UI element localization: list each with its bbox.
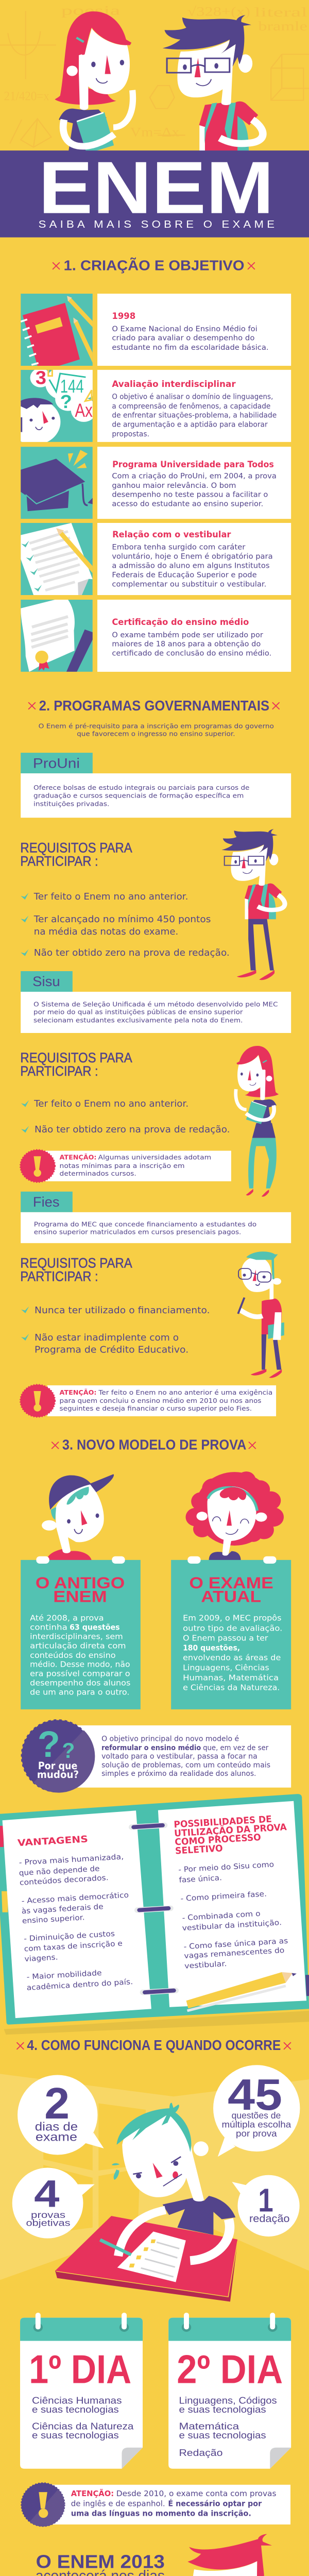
card: certificação do ensino médio — [21, 600, 291, 672]
notebook page: vantagens: - Diminuição de custos — [24, 1929, 115, 1943]
bubble: 4 provas objetivas: 4 — [34, 2173, 60, 2215]
heading: requisitos ProUni: REQUISITOS PARA — [20, 840, 132, 855]
panel: Sisu description — [21, 992, 291, 1033]
badge: por que mudou: Por que — [38, 1760, 77, 1772]
card: 1998 — [21, 294, 291, 366]
checklist: requisitos ProUni: Ter alcançado no mínimo 450 pontos — [33, 914, 211, 925]
tab: ProUni: ProUni — [33, 755, 80, 771]
callout: atenção Sisu: notas mínimas para a inscrição em — [60, 1162, 185, 1170]
heading: requisitos Fies: PARTICIPAR : — [20, 1268, 98, 1284]
panel: o antigo Enem: ENEM — [53, 1588, 107, 1605]
panel: Fies description: Programa do MEC que concede financiamento a estudantes do — [34, 1221, 256, 1228]
notebook page: possibilidades de utilização: COMO PROCESSO — [175, 1832, 261, 1848]
panel: Sisu description: por meio do qual as instituições públicas de ensino superior — [33, 1009, 243, 1016]
badge: por que mudou: ? — [38, 1723, 60, 1765]
callout: por que mudou: voltado para o vestibular, passa a focar na — [101, 1753, 258, 1760]
icon: answer sheet with pencil — [21, 523, 93, 595]
card: certificação do ensino médio: Certificação do ensino médio — [112, 617, 249, 628]
bubble: 4 provas objetivas — [12, 2168, 95, 2239]
panel: o exame atual — [171, 1556, 291, 1709]
card: programa universidade para todos: ganhou maior relevância. O bom — [112, 482, 236, 490]
card: programa universidade para todos: Programa Universidade para Todos — [112, 460, 274, 470]
notebook page: possibilidades de utilização: POSSIBILIDADES DE — [174, 1814, 272, 1830]
decorative math scribbles: poesia — [61, 3, 121, 18]
notebook page: vantagens: - Maior mobilidade — [26, 1969, 102, 1981]
calendar: 1º dia: e suas tecnologias — [32, 2430, 119, 2441]
panel: o antigo Enem: Até 2008, a prova — [30, 1614, 104, 1623]
callout: atenção Fies: Ter feito o Enem no ano anterior é uma exigência — [98, 1389, 272, 1397]
card: certificação do ensino médio: maiores de 18 anos para a obtenção do — [112, 640, 261, 649]
callout: atenção línguas: É necessário optar por — [168, 2499, 262, 2508]
callout: por que mudou: solução de problemas, com um conteúdo mais — [101, 1761, 270, 1770]
title band — [0, 146, 309, 238]
heading: requisitos Fies — [20, 1255, 132, 1284]
callout: atenção línguas: de inglês e de espanhol. — [71, 2499, 165, 2508]
panel: ProUni description — [21, 773, 291, 818]
callout: por que mudou: que, em vez de ser — [203, 1744, 268, 1752]
calendar: 2º dia — [168, 2315, 291, 2469]
checklist: requisitos Sisu: Não ter obtido zero na prova de redação. — [35, 1124, 230, 1135]
panel: o antigo Enem: O ANTIGO — [36, 1574, 125, 1592]
decorative math scribbles: √328+(x) — [187, 4, 250, 19]
checklist: requisitos ProUni — [21, 892, 230, 958]
checklist: requisitos Fies: Nunca ter utilizado o financiamento. — [35, 1305, 210, 1316]
callout: atenção línguas: ATENÇÃO: — [71, 2489, 114, 2498]
heading: section 3: 3. NOVO MODELO DE PROVA — [62, 1437, 246, 1453]
bubble: 45 questões: múltipla escolha — [221, 2120, 291, 2130]
card: relação com o vestibular: Relação com o vestibular — [112, 530, 231, 540]
card: programa universidade para todos — [21, 447, 291, 519]
icon: exclamation badge — [20, 1150, 55, 1182]
heading: requisitos Fies: REQUISITOS PARA — [20, 1255, 132, 1270]
panel: o antigo Enem: médio. Desse modo, não — [30, 1660, 130, 1669]
illustration: boy with pencil and book — [238, 1251, 284, 1378]
panel: o exame atual: O EXAME — [189, 1574, 273, 1592]
notebook page: vantagens: VANTAGENS — [17, 1834, 88, 1849]
heading: requisitos ProUni: PARTICIPAR : — [20, 854, 98, 869]
bubble: 4 provas objetivas: provas — [31, 2210, 65, 2220]
notebook page: possibilidades de utilização: fase única. — [179, 1874, 222, 1885]
card: 1998: estudante no fim da escolaridade básica. — [112, 344, 269, 352]
notebook page: possibilidades de utilização: UTILIZAÇÃO DA PROVA — [174, 1821, 287, 1839]
notebook page: vantagens — [17, 1834, 133, 1992]
illustration: student taking the exam — [55, 2103, 237, 2302]
card: programa universidade para todos: desempenho no teste passou a facilitar o — [112, 491, 268, 499]
panel: o antigo Enem: conteúdos do ensino — [30, 1651, 116, 1660]
bubble: 2 dias de exame — [18, 2075, 104, 2155]
calendar: 1º dia: 1º DIA — [29, 2347, 131, 2392]
illustration: full body girl — [236, 1046, 279, 1197]
panel: o exame atual: Humanas, Matemática — [183, 1673, 279, 1682]
bubble: 4 provas objetivas: objetivas — [26, 2217, 71, 2228]
illustration: boy with cap — [42, 1474, 114, 1561]
notebook page: vantagens: que não depende de — [19, 1865, 100, 1877]
notebook page: vantagens: às vagas federais de — [21, 1903, 104, 1916]
card: 1998: criado para avaliar o desempenho do — [112, 334, 255, 343]
card: programa universidade para todos: Com a criação do ProUni, em 2004, a prova — [112, 472, 277, 480]
badge: por que mudou: mudou? — [37, 1769, 79, 1781]
icon: boy thinking with math cloud — [21, 367, 93, 442]
callout: por que mudou: simples e próximo da realidade dos alunos. — [101, 1770, 256, 1778]
icon: graduation cap — [21, 447, 93, 519]
calendar: 1º dia: Ciências da Natureza — [32, 2421, 134, 2432]
callout: atenção Sisu: ATENÇÃO: — [60, 1154, 96, 1162]
notebook page: vantagens: - Prova mais humanizada, — [19, 1853, 124, 1867]
bubble: 2 dias de exame: dias de — [35, 2121, 78, 2133]
notebook page: possibilidades de utilização: vestibular da instituição. — [182, 1919, 282, 1933]
calendar: 1º dia: e suas tecnologias — [32, 2404, 119, 2415]
heading: requisitos Sisu: REQUISITOS PARA — [20, 1050, 132, 1065]
notebook page: vantagens: - Acesso mais democrático — [21, 1891, 129, 1905]
notebook page: possibilidades de utilização: vestibular. — [184, 1960, 227, 1971]
card: 1998: O Exame Nacional do Ensino Médio foi — [112, 325, 258, 333]
section 2 intro text — [39, 723, 274, 738]
illustration: full body boy — [221, 829, 285, 980]
card: avaliação interdisciplinar: O objetivo é analisar o domínio de linguagens, — [112, 393, 273, 401]
date: Enem 2013: O ENEM 2013 — [36, 2551, 165, 2572]
illustration: red haired boy in teal circle — [181, 2534, 290, 2576]
checklist: requisitos Fies: Não estar inadimplente com o — [35, 1332, 179, 1343]
classroom wall and window — [0, 2074, 309, 2280]
decorative math scribbles — [0, 3, 309, 147]
heading: requisitos Sisu: PARTICIPAR : — [20, 1063, 98, 1079]
panel: Sisu description: O Sistema de Seleção Unificada é um método desenvolvido pelo MEC — [33, 1001, 278, 1008]
notebook page: possibilidades de utilização — [174, 1814, 288, 1971]
callout: atenção línguas: uma das línguas no momento da inscrição. — [71, 2509, 251, 2518]
notebook page: possibilidades de utilização: - Como primeira fase. — [180, 1890, 267, 1903]
tab: Sisu — [21, 971, 73, 992]
bubble: 45 questões — [213, 2065, 300, 2157]
card: relação com o vestibular: Federais de Educação Superior e pode — [112, 571, 257, 579]
card: programa universidade para todos: acesso do estudante ao ensino superior. — [112, 500, 263, 508]
checklist: requisitos ProUni: Não ter obtido zero na prova de redação. — [34, 948, 230, 958]
card: 1998: 1998 — [112, 311, 135, 321]
callout: atenção Sisu — [20, 1150, 231, 1182]
tab: Fies: Fies — [33, 1194, 60, 1210]
callout: atenção línguas: Desde 2010, o exame conta com provas — [116, 2489, 276, 2498]
decorative math scribbles: 21/420=x — [4, 89, 49, 103]
icon: diploma with seal — [21, 600, 93, 672]
card: certificação do ensino médio: certificado de conclusão do ensino médio. — [112, 650, 271, 657]
bubble: 45 questões: por prova — [236, 2128, 277, 2139]
callout: por que mudou: O objetivo principal do novo modelo é — [101, 1735, 239, 1743]
panel: ProUni description: Oferece bolsas de estudo integrais ou parciais para cursos de — [33, 785, 249, 792]
calendar: 2º dia: Matemática — [179, 2421, 239, 2432]
heading: section 1: 1. CRIAÇÃO E OBJETIVO — [64, 257, 244, 274]
icon: boy thinking with math cloud: Ax — [75, 400, 93, 421]
notebook page: possibilidades de utilização: - Combinada com o — [182, 1909, 261, 1922]
calendar: 2º dia: Linguagens, Códigos — [179, 2396, 277, 2406]
panel: Sisu description: selecionam estudantes exclusivamente pela nota do Enem. — [33, 1017, 243, 1025]
card: avaliação interdisciplinar: propostas. — [112, 431, 149, 438]
panel: o antigo Enem: interdisciplinares, sem — [30, 1632, 123, 1641]
notebook page: vantagens: ensino superior. — [22, 1913, 85, 1925]
panel: o exame atual: ATUAL — [201, 1588, 261, 1605]
panel: o antigo Enem: era possível comparar o — [30, 1669, 130, 1678]
icon: boy thinking with math cloud: ? — [60, 391, 72, 412]
callout: atenção Fies: seguintes e deseja financiar o curso superior pelo Fies. — [60, 1405, 252, 1413]
decorative math scribbles: bramle — [258, 19, 307, 33]
section 2 intro text: O Enem é pré-requisito para a inscrição em programas do governo — [39, 723, 274, 730]
bubble: 45 questões: 45 — [228, 2070, 282, 2119]
checklist: requisitos Fies: Programa de Crédito Educativo. — [35, 1345, 188, 1355]
tab: Fies — [21, 1192, 73, 1212]
checklist: requisitos Fies — [21, 1305, 210, 1355]
card: relação com o vestibular: Embora tenha surgido com caráter — [112, 544, 245, 551]
callout: atenção Fies: para quem concluiu o ensino médio em 2010 ou nos anos — [60, 1397, 262, 1405]
notebook page: possibilidades de utilização: vagas remanescentes do — [184, 1946, 285, 1960]
notebook page: possibilidades de utilização: SELETIVO — [175, 1843, 223, 1856]
callout: por que mudou — [22, 1720, 291, 1793]
panel: o antigo Enem — [21, 1556, 141, 1709]
bubble: 1 redação: redação — [249, 2213, 289, 2225]
illustration: girl holding a book — [55, 11, 133, 155]
section 2 intro text: que favorecem o ingresso no ensino superior. — [77, 731, 235, 738]
panel: o exame atual: envolvendo as áreas de — [183, 1653, 281, 1662]
calendar: 2º dia: Redação — [179, 2448, 222, 2459]
panel: criação e objetivo cards — [8, 294, 291, 595]
panel: o exame atual: 180 questões, — [183, 1643, 240, 1652]
checklist: requisitos ProUni: na média das notas do exame. — [34, 926, 178, 937]
panel: o exame atual: Em 2009, o MEC propôs — [183, 1614, 282, 1623]
bubble: 1 redação: 1 — [258, 2182, 273, 2219]
icon: purple exclamation badge — [21, 2483, 65, 2527]
calendar: 2º dia: e suas tecnologias — [179, 2430, 266, 2441]
tab: ProUni — [21, 753, 93, 773]
calendar: 1º dia: Ciências Humanas — [32, 2396, 122, 2406]
notebook page: vantagens: com taxas de inscrição e — [24, 1939, 123, 1953]
notebook page: vantagens: acadêmica dentro do país. — [26, 1978, 133, 1992]
card: relação com o vestibular: a admissão do aluno em alguns Institutos — [112, 562, 269, 570]
icon: exclamation badge — [20, 1385, 55, 1417]
panel: o exame atual: O Enem passou a ter — [183, 1634, 268, 1643]
notebook page: possibilidades de utilização: - Como fase única para as — [183, 1937, 288, 1951]
panel: Fies description — [21, 1212, 291, 1243]
checklist: requisitos Sisu — [21, 1098, 230, 1135]
panel: o antigo Enem: articulação direta com — [30, 1641, 126, 1650]
callout: atenção Sisu: determinados cursos. — [60, 1170, 136, 1178]
heading: requisitos Sisu — [20, 1050, 132, 1079]
heading: section 2: 2. PROGRAMAS GOVERNAMENTAIS — [39, 698, 269, 714]
panel: o exame atual: Linguagens, Ciências — [183, 1663, 269, 1672]
notebook page: possibilidades de utilização: - Por meio do Sisu como — [178, 1860, 274, 1874]
panel: o antigo Enem: 63 questões — [70, 1623, 120, 1632]
panel: o exame atual: e Ciências da Natureza. — [183, 1683, 280, 1692]
icon: boy thinking with math cloud: 3 — [36, 367, 46, 388]
decorative math scribbles: Vm=Δx — [130, 125, 179, 139]
callout: por que mudou: reformular o ensino médio — [101, 1744, 201, 1752]
checklist: requisitos ProUni: Ter feito o Enem no ano anterior. — [33, 892, 188, 902]
illustration: boy with glasses and backpack — [163, 15, 263, 158]
callout: atenção Fies — [20, 1385, 276, 1417]
notebook page: vantagens: conteúdos decorados. — [19, 1874, 109, 1887]
calendar: 2º dia: e suas tecnologias — [179, 2404, 266, 2415]
heading: requisitos ProUni — [20, 840, 132, 869]
title band: ENEM — [39, 146, 274, 229]
card: avaliação interdisciplinar: a compreensão de fenômenos, a capacidade — [112, 402, 270, 411]
panel: ProUni description: instituições privadas. — [33, 801, 109, 808]
illustration: open notebook — [0, 1794, 309, 2035]
panel: o antigo Enem: de um ano para o outro. — [30, 1688, 129, 1697]
panel: o antigo Enem: desempenho dos alunos — [30, 1679, 130, 1687]
bubble: 1 redação — [232, 2175, 300, 2236]
panel: ProUni description: graduação e cursos sequenciais de formação específica em — [33, 792, 244, 800]
calendar: 1º dia — [20, 2315, 143, 2469]
callout: atenção Fies: ATENÇÃO: — [60, 1388, 96, 1397]
panel: o antigo Enem: continha — [30, 1623, 67, 1632]
card: avaliação interdisciplinar: de enfrentar situações-problema, a habilidade — [112, 412, 277, 420]
bubble: 2 dias de exame: 2 — [44, 2079, 70, 2128]
card: relação com o vestibular: complementar ou substituir o vestibular. — [112, 581, 266, 588]
calendar: 2º dia: 2º DIA — [177, 2347, 283, 2392]
title band: SAIBA MAIS SOBRE O EXAME — [39, 218, 274, 230]
bubble: 2 dias de exame: exame — [36, 2131, 77, 2144]
badge: por que mudou — [22, 1720, 95, 1793]
notebook page: vantagens: viagens. — [24, 1953, 58, 1963]
tab: Sisu: Sisu — [32, 974, 60, 989]
card: certificação do ensino médio: O exame também pode ser utilizado por — [112, 631, 263, 639]
panel: o exame atual: outro tipo de avaliação. — [183, 1624, 282, 1633]
icon: notebook and pencils — [21, 294, 93, 366]
card: avaliação interdisciplinar — [8, 366, 291, 445]
illustration: curly haired girl — [185, 1471, 284, 1561]
card: avaliação interdisciplinar: Avaliação interdisciplinar — [112, 380, 236, 389]
checklist: requisitos Sisu: Ter feito o Enem no ano anterior. — [33, 1098, 188, 1109]
bubble: 45 questões: questões de — [232, 2111, 281, 2121]
callout: atenção Sisu: Algumas universidades adotam — [98, 1154, 211, 1162]
badge: por que mudou: ? — [62, 1738, 75, 1762]
card: relação com o vestibular: voluntário, hoje o Enem é obrigatório para — [112, 553, 273, 561]
card: relação com o vestibular — [21, 523, 291, 595]
callout: atenção línguas — [21, 2483, 290, 2527]
decorative math scribbles: literal — [254, 5, 307, 20]
icon: boy thinking with math cloud: 144 — [60, 376, 84, 397]
panel: Fies description: ensino superior matriculados em cursos presenciais pagos. — [34, 1229, 241, 1236]
card: avaliação interdisciplinar: de argumentação e a aptidão para elaborar — [112, 421, 268, 429]
